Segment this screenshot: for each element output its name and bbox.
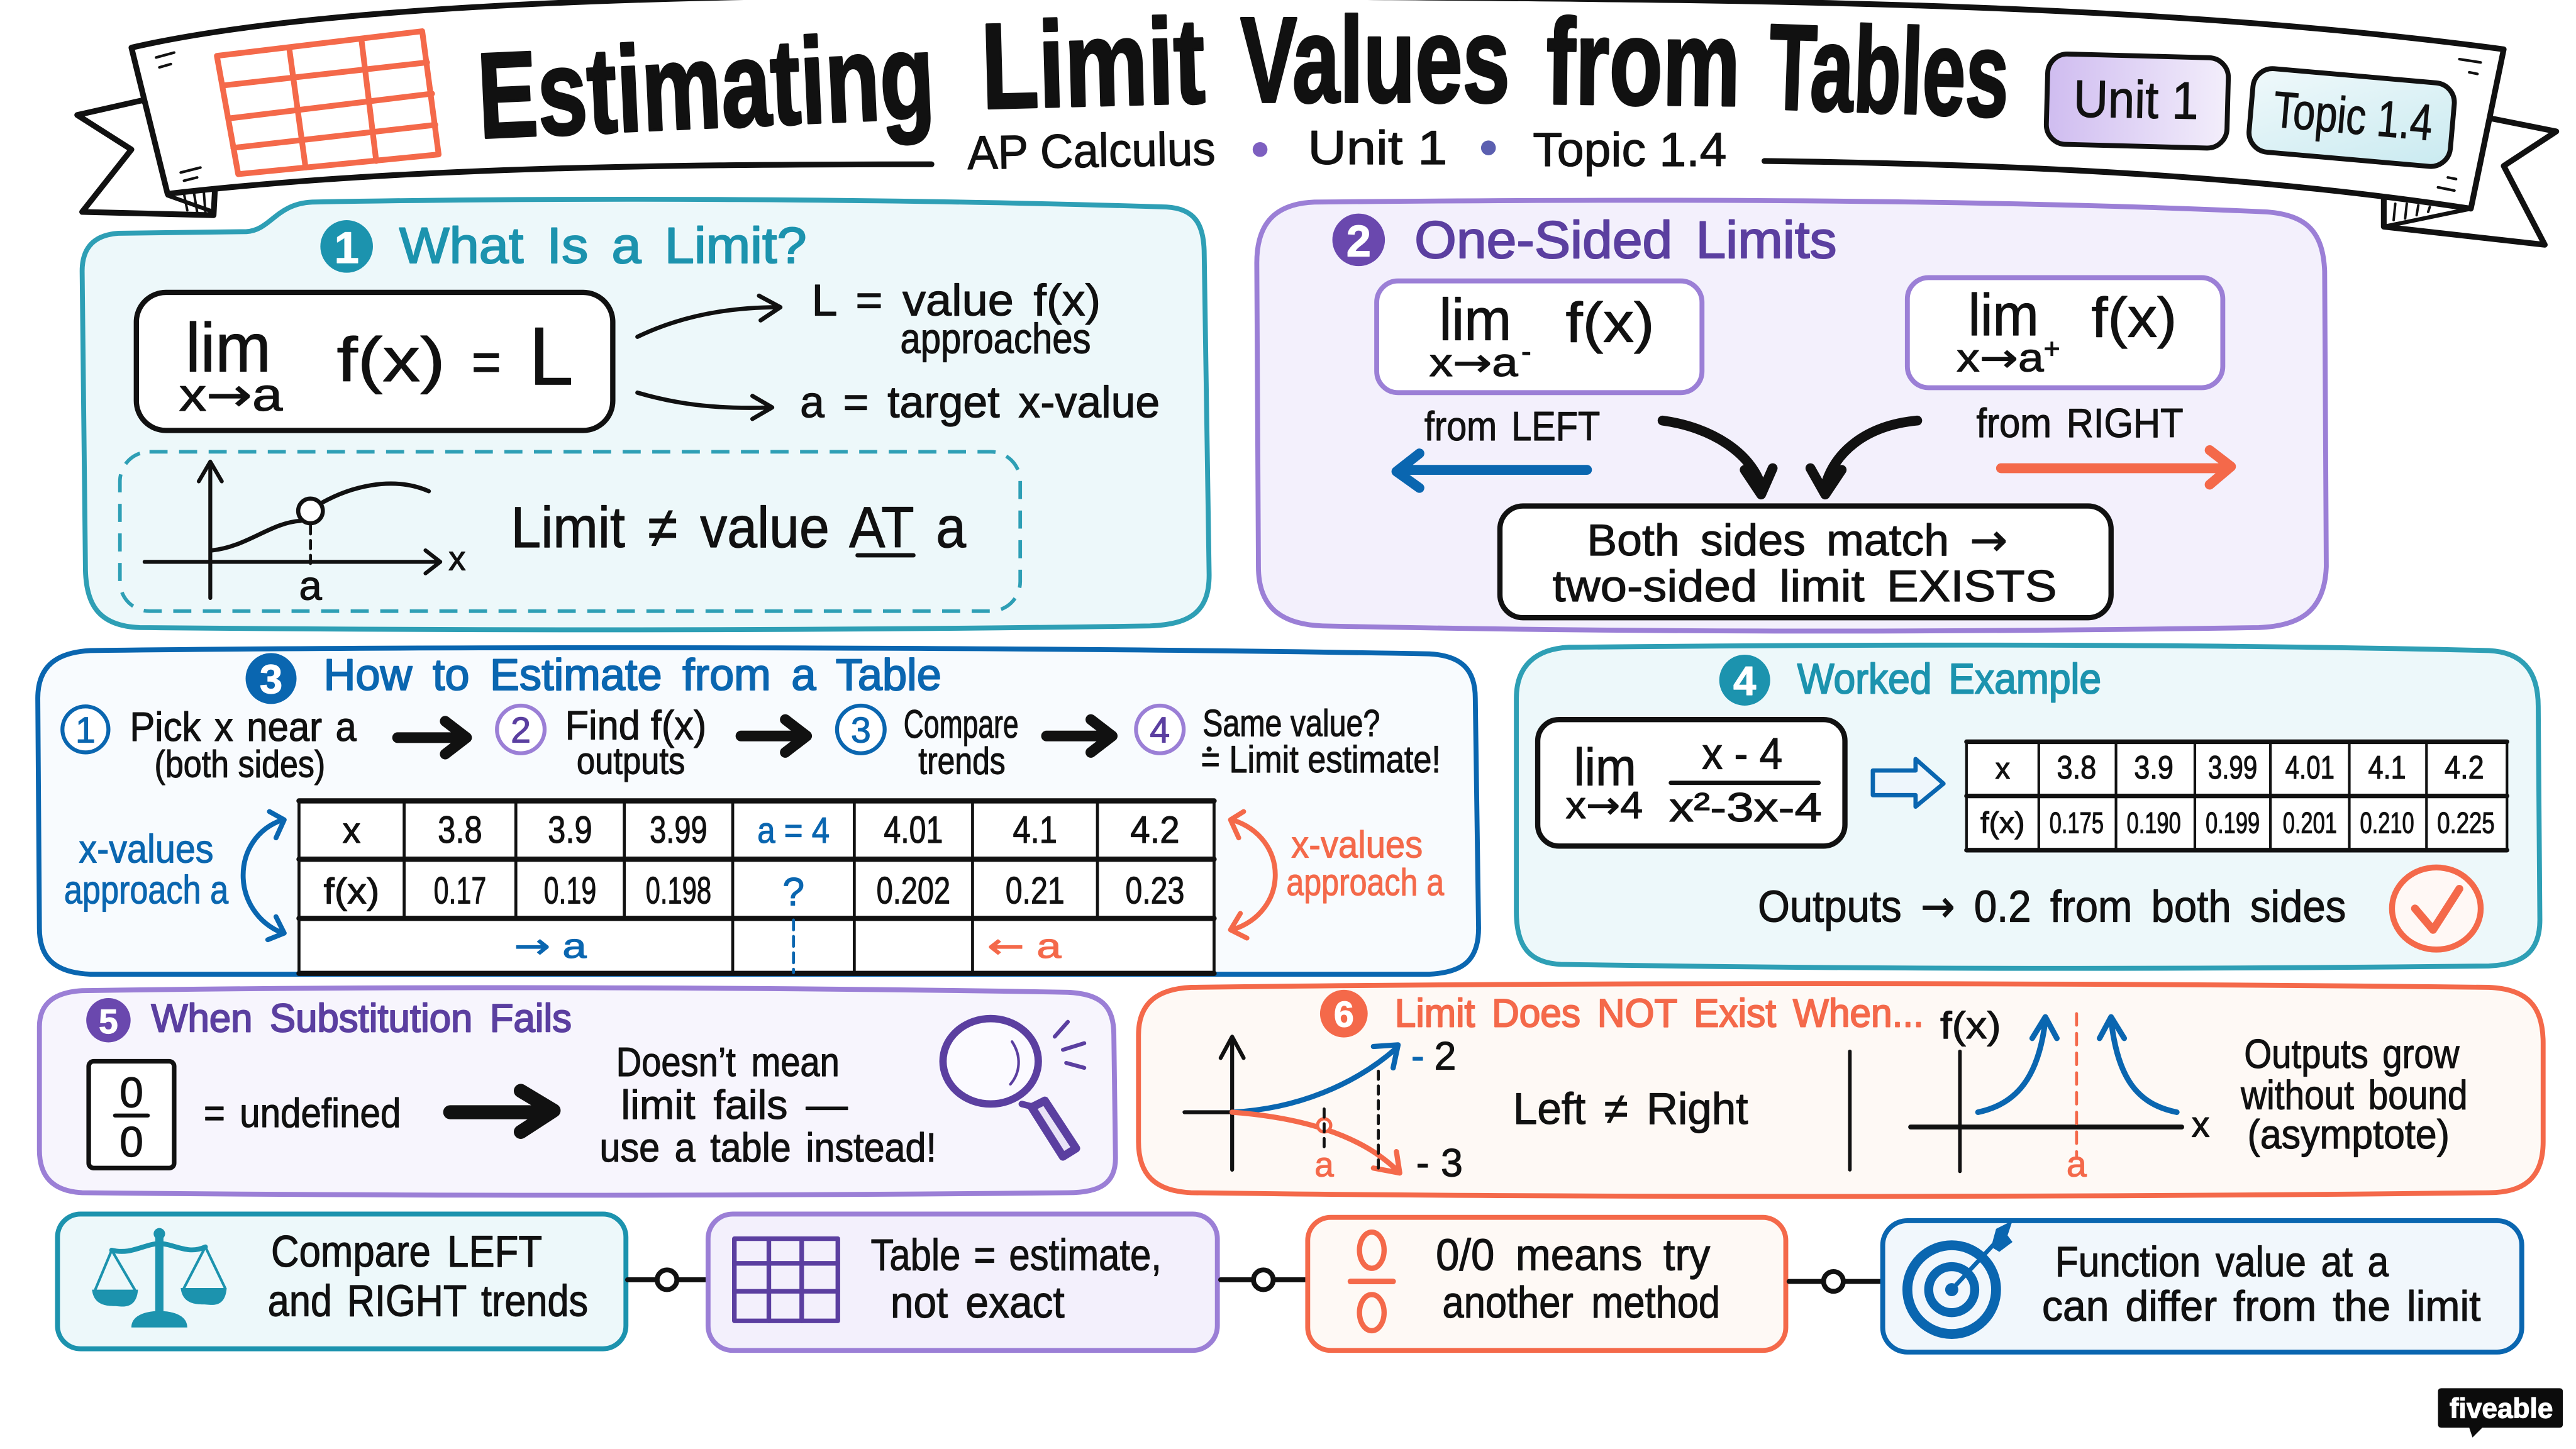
left-right mismatch graph: 3 bbox=[1441, 1141, 1463, 1185]
right limit box bbox=[1907, 277, 2223, 387]
large value table: a = 4 bbox=[757, 811, 830, 851]
right limit box: f(x) bbox=[2091, 287, 2177, 349]
mini graph bbox=[145, 462, 466, 608]
step 3 bbox=[837, 702, 1019, 782]
asymptote graph: a bbox=[2067, 1144, 2087, 1184]
badge: Topic 1.4 bbox=[2247, 67, 2456, 168]
worked value table: 0.225 bbox=[2437, 806, 2495, 839]
black arrow from left bbox=[1663, 421, 1773, 494]
panel: limit does not exist bbox=[1138, 984, 2543, 1196]
limit formula box: L bbox=[529, 310, 574, 402]
large value table: 0.17 bbox=[434, 870, 486, 912]
arrow to L bbox=[638, 296, 780, 337]
takeaway: zero over zero: another method bbox=[1443, 1277, 1720, 1327]
icon: check mark bbox=[2392, 867, 2480, 950]
asymptote graph: x bbox=[2192, 1105, 2210, 1145]
left limit box: - bbox=[1521, 335, 1531, 368]
panel: how to estimate from a table bbox=[38, 648, 1479, 974]
explanation text bbox=[599, 1039, 936, 1170]
badge: Topic 1.4: Topic 1.4 bbox=[2271, 81, 2434, 152]
panel: what is a limit bbox=[82, 199, 1209, 630]
icon: target bbox=[1907, 1221, 2012, 1334]
left limit box: x→ a bbox=[1430, 340, 1518, 386]
takeaway: function value bbox=[1883, 1221, 2522, 1352]
left limit box bbox=[1377, 281, 1702, 392]
orange right arrow bbox=[2001, 450, 2231, 485]
left approach label: approach a bbox=[64, 869, 228, 913]
dashed callout bbox=[120, 452, 1020, 611]
asymptote graph: f(x) bbox=[1940, 1004, 2001, 1046]
worked value table: 4.2 bbox=[2445, 750, 2484, 786]
badge: Unit 1: Unit 1 bbox=[2073, 69, 2199, 130]
worked value table: 0.190 bbox=[2127, 806, 2181, 839]
takeaway: table is estimate bbox=[708, 1214, 1218, 1350]
hollow arrow bbox=[1873, 759, 1943, 807]
subtitle: AP Calculus bbox=[967, 122, 1216, 180]
step 1 bbox=[62, 704, 357, 786]
arrow step 3 to 4 bbox=[1046, 719, 1112, 752]
title: Tables bbox=[1767, 0, 2011, 143]
heading: worked example bbox=[1719, 655, 2101, 706]
left-right mismatch graph: - bbox=[1411, 1035, 1424, 1079]
takeaway: compare trends bbox=[57, 1214, 626, 1349]
left not equal right: Left ≠ Right bbox=[1513, 1084, 1748, 1133]
black arrow from right bbox=[1811, 421, 1917, 494]
subtitle: Unit 1 bbox=[1307, 121, 1447, 175]
explanation text: Doesn’t mean bbox=[616, 1039, 840, 1085]
worked value table: 4.01 bbox=[2285, 750, 2334, 786]
takeaway: function value: Function value at a bbox=[2055, 1239, 2389, 1286]
L definition: L = value f(x) bbox=[811, 275, 1101, 325]
asymptote explanation: Outputs grow bbox=[2244, 1031, 2460, 1077]
takeaway: table is estimate: Table = estimate, bbox=[870, 1230, 1162, 1279]
step 4: Same value? bbox=[1202, 702, 1380, 744]
divider: panel 6 bbox=[1849, 1052, 1850, 1170]
step 2: Find f(x) bbox=[565, 702, 706, 748]
worked value table: 3.8 bbox=[2057, 750, 2096, 786]
left-right mismatch graph bbox=[1184, 1035, 1463, 1185]
worked value table bbox=[1967, 741, 2507, 851]
takeaway: table is estimate: not exact bbox=[891, 1277, 1065, 1327]
worked formula box: x - 4 bbox=[1702, 729, 1782, 779]
large value table: f(x) bbox=[324, 872, 379, 912]
step 1: Pick x near a bbox=[130, 704, 357, 750]
limit formula box: = bbox=[472, 331, 501, 393]
large value table: 4.2 bbox=[1130, 809, 1180, 851]
title bbox=[475, 0, 2011, 164]
panel: worked example bbox=[1516, 645, 2540, 969]
title banner bbox=[77, 0, 2557, 245]
mini graph: a bbox=[299, 562, 323, 608]
banner ribbon bbox=[131, 0, 2504, 209]
zero over zero box: 0 bbox=[119, 1119, 143, 1166]
right limit box: lim bbox=[1968, 282, 2039, 348]
worked value table: f(x) bbox=[1980, 806, 2025, 839]
left limit box: lim bbox=[1439, 287, 1511, 353]
connector 1 bbox=[628, 1270, 706, 1290]
large value table: 3.8 bbox=[438, 809, 482, 851]
L definition bbox=[811, 275, 1101, 363]
asymptote explanation: (asymptote) bbox=[2248, 1111, 2450, 1157]
heading: what is a limit: 1 bbox=[335, 223, 359, 272]
worked value table: 0.175 bbox=[2050, 806, 2104, 839]
large value table: 0.23 bbox=[1125, 870, 1184, 912]
heading: limit does not exist: 6 bbox=[1334, 995, 1354, 1035]
two-sided result box bbox=[1500, 506, 2111, 618]
right approach label: approach a bbox=[1286, 862, 1445, 904]
connector 2 bbox=[1221, 1270, 1307, 1290]
worked value table: 3.9 bbox=[2134, 750, 2174, 786]
from left label: from LEFT bbox=[1424, 403, 1600, 449]
large value table: 3.9 bbox=[548, 809, 592, 851]
asymptote explanation: without bound bbox=[2240, 1072, 2468, 1118]
heading: when substitution fails: 5 bbox=[99, 1002, 118, 1041]
worked result text: Outputs → 0.2 from both sides bbox=[1758, 880, 2346, 932]
large value table: 0.21 bbox=[1006, 870, 1065, 912]
takeaway: compare trends: and RIGHT trends bbox=[268, 1275, 588, 1325]
worked value table: 0.199 bbox=[2206, 806, 2260, 839]
step 1: 1 bbox=[75, 711, 96, 751]
heading: worked example: 4 bbox=[1733, 658, 1756, 704]
left approach label: x-values bbox=[79, 827, 214, 871]
icon: purple table bbox=[735, 1239, 838, 1321]
icon: magnifying glass bbox=[943, 1019, 1084, 1157]
step 1: (both sides) bbox=[155, 743, 325, 786]
blue left arrow bbox=[1396, 453, 1587, 488]
worked value table: 0.210 bbox=[2360, 806, 2414, 839]
large value table bbox=[299, 800, 1214, 974]
explanation text: limit fails — bbox=[621, 1082, 848, 1128]
step 2: 2 bbox=[511, 711, 531, 751]
left approach label bbox=[64, 811, 284, 940]
zero over zero box bbox=[89, 1062, 174, 1168]
zero over zero box: 0 bbox=[119, 1070, 143, 1117]
two-sided result box: Both sides match → bbox=[1587, 514, 2007, 566]
takeaway: zero over zero bbox=[1307, 1218, 1786, 1350]
L definition: approaches bbox=[901, 316, 1091, 363]
step 3: 3 bbox=[851, 711, 871, 751]
left limit box: f(x) bbox=[1565, 291, 1655, 353]
heading: limit does not exist: Limit Does NOT Exist When... bbox=[1395, 992, 1924, 1036]
worked value table: x bbox=[1996, 752, 2010, 785]
a definition: a = target x-value bbox=[800, 377, 1160, 427]
from right label: from RIGHT bbox=[1977, 400, 2184, 446]
heading: when substitution fails: When Substitution Fails bbox=[151, 996, 572, 1040]
step 3: trends bbox=[918, 740, 1006, 782]
logo: fiveable: fiveable bbox=[2450, 1393, 2553, 1424]
large value table: 3.99 bbox=[650, 809, 708, 851]
large value table: ← a bbox=[987, 926, 1062, 966]
heading: how to estimate: 3 bbox=[260, 656, 282, 702]
large value table: 4.1 bbox=[1013, 809, 1057, 851]
asymptote graph bbox=[1911, 1004, 2210, 1184]
limit formula box: x→ a bbox=[179, 369, 283, 422]
worked formula box: x→4 bbox=[1565, 784, 1643, 828]
limit formula box bbox=[136, 292, 613, 430]
right limit box: x→ a bbox=[1957, 335, 2044, 380]
heading: one-sided limits: 2 bbox=[1346, 216, 1371, 266]
right approach label: x-values bbox=[1291, 824, 1423, 866]
fat black arrow bbox=[450, 1091, 553, 1132]
subtitle bbox=[967, 121, 1726, 180]
undefined text: = undefined bbox=[204, 1090, 401, 1136]
right limit box: + bbox=[2044, 333, 2060, 364]
takeaway: function value: can differ from the limit bbox=[2042, 1283, 2481, 1330]
limit formula box: lim bbox=[186, 309, 271, 386]
step 4: = Limit estimate! bbox=[1201, 738, 1441, 780]
takeaway: compare trends: Compare LEFT bbox=[271, 1226, 542, 1276]
icon: red table bbox=[217, 31, 438, 174]
banner left tail bbox=[77, 100, 215, 215]
step 2 bbox=[497, 702, 706, 782]
subtitle: Topic 1.4 bbox=[1533, 123, 1726, 177]
arrow to a bbox=[638, 392, 772, 419]
left-right mismatch graph: 2 bbox=[1434, 1035, 1456, 1079]
step 2: outputs bbox=[577, 740, 685, 782]
step 3: Compare bbox=[904, 702, 1019, 747]
right approach label bbox=[1231, 811, 1445, 938]
heading: how to estimate: How to Estimate from a Table bbox=[324, 650, 941, 699]
arrow step 2 to 3 bbox=[741, 719, 807, 752]
left-right mismatch graph: - bbox=[1416, 1141, 1430, 1185]
limit not equal text: Limit ≠ value AT a bbox=[511, 496, 966, 560]
heading: worked example: Worked Example bbox=[1797, 655, 2101, 702]
left-right mismatch graph: a bbox=[1314, 1145, 1334, 1184]
step 4: 4 bbox=[1150, 711, 1170, 751]
icon: balance scale bbox=[92, 1228, 226, 1328]
worked value table: 3.99 bbox=[2208, 750, 2257, 786]
worked formula box: lim bbox=[1574, 738, 1636, 797]
connector 3 bbox=[1789, 1272, 1881, 1291]
large value table: 0.19 bbox=[544, 870, 596, 912]
worked value table: 4.1 bbox=[2368, 750, 2406, 786]
panel: when substitution fails bbox=[40, 987, 1116, 1195]
step 4 bbox=[1136, 702, 1441, 780]
explanation text: use a table instead! bbox=[599, 1124, 936, 1170]
arrow step 1 to 2 bbox=[397, 721, 467, 754]
large value table: 0.198 bbox=[646, 870, 711, 912]
panel: one-sided limits bbox=[1257, 200, 2326, 631]
title: Estimating bbox=[475, 8, 937, 164]
limit formula box: f(x) bbox=[337, 325, 445, 395]
heading: what is a limit: What Is a Limit? bbox=[399, 218, 807, 274]
banner right tail bbox=[2384, 118, 2557, 245]
mini graph: x bbox=[448, 538, 466, 577]
asymptote explanation bbox=[2240, 1031, 2468, 1157]
large value table: 0.202 bbox=[877, 870, 950, 912]
takeaway: zero over zero: 0/0 means try bbox=[1436, 1230, 1711, 1279]
logo: fiveable bbox=[2438, 1388, 2563, 1438]
large value table: → a bbox=[514, 926, 587, 966]
icon: orange fraction bbox=[1350, 1232, 1393, 1331]
worked formula box: x²-3x-4 bbox=[1669, 784, 1822, 830]
heading: one-sided limits: One-Sided Limits bbox=[1414, 210, 1836, 269]
worked formula box bbox=[1538, 719, 1845, 846]
large value table: 4.01 bbox=[884, 809, 943, 851]
two-sided result box: two-sided limit EXISTS bbox=[1553, 561, 2057, 611]
worked value table: 0.201 bbox=[2283, 806, 2337, 839]
large value table: x bbox=[343, 811, 361, 851]
large value table: ? bbox=[782, 870, 804, 914]
badge: Unit 1 bbox=[2046, 53, 2229, 148]
